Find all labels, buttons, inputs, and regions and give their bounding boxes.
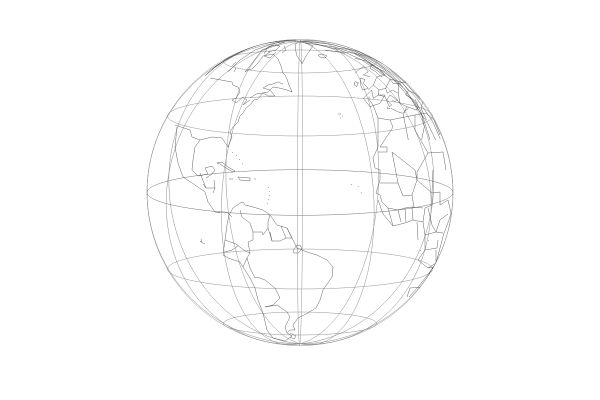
Africa xyxy=(351,98,451,297)
Caribbean islands xyxy=(200,152,270,244)
South America xyxy=(223,202,333,341)
country outlines xyxy=(175,40,451,341)
globe xyxy=(146,39,454,346)
North America outline xyxy=(175,40,296,217)
Arctic and Siberian coast bundle xyxy=(300,41,420,100)
globe outline xyxy=(147,40,453,346)
graticule meridians xyxy=(131,10,469,375)
Greenland and Iceland xyxy=(295,42,343,118)
Europe and Asia near the limb xyxy=(325,48,440,140)
graticule parallels xyxy=(147,50,453,335)
